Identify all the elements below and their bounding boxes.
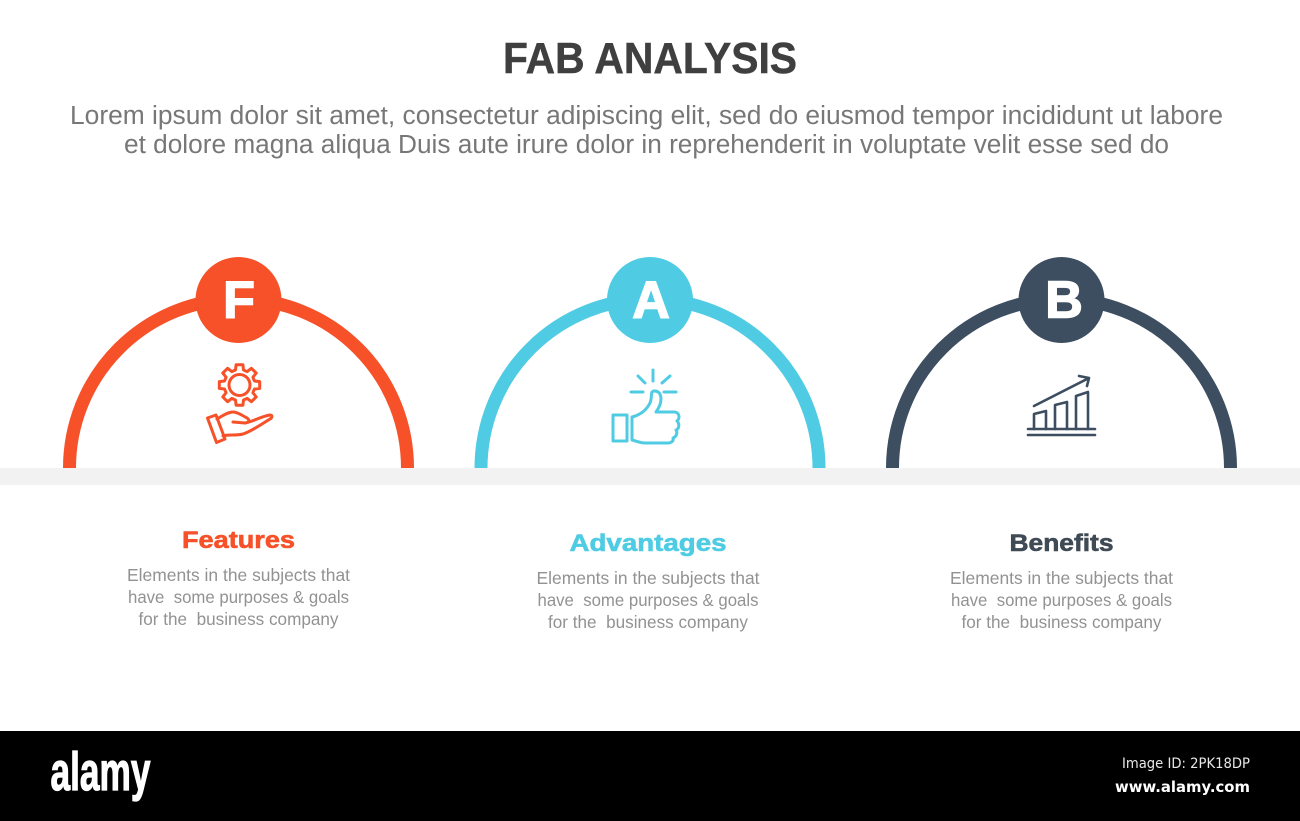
benefits badge — [1018, 257, 1104, 343]
panel: features — [70, 257, 408, 629]
icon: gear on hand — [208, 365, 272, 442]
panel: advantages — [481, 257, 819, 632]
panel: benefits — [892, 257, 1230, 632]
advantages description — [536, 568, 760, 632]
footer image id: Image ID: 2PK18DP — [1122, 756, 1250, 772]
features description: for the business company — [138, 609, 339, 629]
advantages description: Elements in the subjects that — [536, 568, 760, 588]
advantages description: have some purposes & goals — [538, 590, 759, 610]
benefits description: have some purposes & goals — [951, 590, 1172, 610]
advantages arc — [481, 299, 819, 468]
features badge: F — [223, 272, 255, 330]
features arc — [70, 299, 408, 468]
title: FAB ANALYSIS — [503, 35, 797, 83]
intro text: et dolore magna aliqua Duis aute irure dolor in reprehenderit in voluptate velit esse sed do — [124, 131, 1169, 159]
intro text — [70, 102, 1223, 159]
benefits description: Elements in the subjects that — [950, 568, 1173, 588]
features description — [127, 565, 350, 629]
advantages badge — [607, 257, 693, 343]
benefits description: for the business company — [962, 612, 1162, 632]
features description: have some purposes & goals — [128, 587, 349, 607]
icon: growth chart — [1028, 376, 1095, 435]
advantages label: Advantages — [570, 530, 726, 557]
icon: thumbs up — [613, 370, 679, 443]
advantages description: for the business company — [548, 612, 748, 632]
features label: Features — [182, 527, 295, 554]
benefits label: Benefits — [1010, 530, 1114, 557]
benefits description — [950, 568, 1173, 632]
horizontal base band — [0, 468, 1300, 485]
features badge — [196, 257, 282, 343]
advantages badge: A — [632, 272, 670, 330]
footer bar — [0, 731, 1300, 821]
footer logo: alamy — [50, 742, 150, 802]
features description: Elements in the subjects that — [127, 565, 350, 585]
benefits arc — [892, 299, 1230, 468]
intro text: Lorem ipsum dolor sit amet, consectetur adipiscing elit, sed do eiusmod tempor incididunt ut labore — [70, 102, 1223, 130]
benefits badge: B — [1045, 272, 1083, 330]
footer url: www.alamy.com — [1115, 778, 1250, 796]
